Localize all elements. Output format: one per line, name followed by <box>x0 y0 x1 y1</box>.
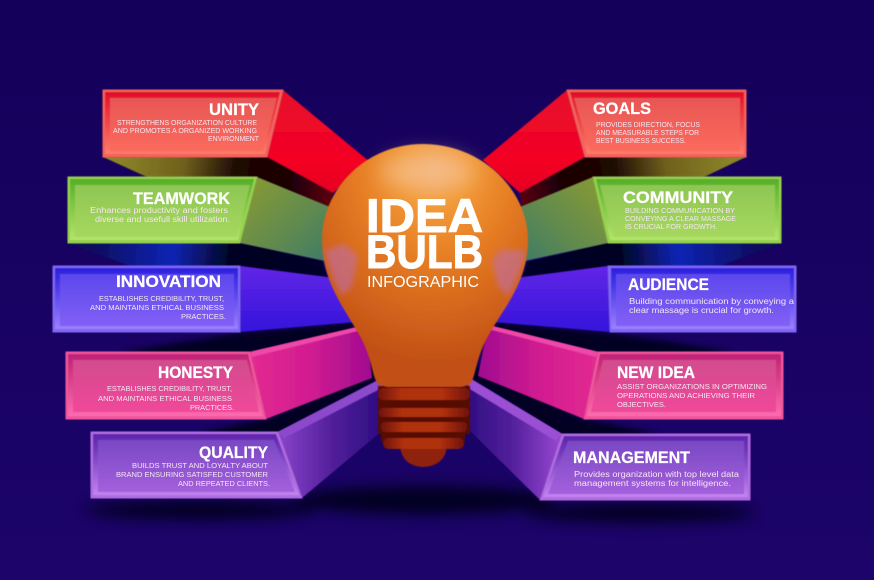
panel: quality <box>91 378 382 498</box>
honesty description: AND MAINTAINS ETHICAL BUSINESS <box>98 394 232 403</box>
unity description: STRENGTHENS ORGANIZATION CULTURE <box>117 118 257 127</box>
bulb title: INFOGRAPHIC <box>367 274 479 291</box>
new idea description: ASSIST ORGANIZATIONS IN OPTIMIZING <box>617 382 767 391</box>
quality side face <box>278 378 382 498</box>
community description: IS CRUCIAL FOR GROWTH. <box>625 222 717 231</box>
new idea side highlight <box>488 325 598 357</box>
unity front face <box>103 90 283 157</box>
teamwork description: diverse and usefull skill utilization. <box>95 215 230 224</box>
honesty description: ESTABLISHES CREDIBILITY, TRUST, <box>107 384 232 393</box>
community description: BUILDING COMMUNICATION BY <box>625 206 735 215</box>
panel: audience <box>494 266 796 332</box>
unity description: AND PROMOTES A ORGANIZED WORKING <box>113 126 257 135</box>
new idea side face <box>478 325 598 419</box>
new idea description: OPERATIONS AND ACHIEVING THEIR <box>617 391 755 400</box>
audience title: AUDIENCE <box>628 275 709 294</box>
quality description: BUILDS TRUST AND LOYALTY ABOUT <box>132 461 268 470</box>
management side highlight <box>468 377 562 441</box>
goals underside <box>520 157 746 210</box>
innovation description: AND MAINTAINS ETHICAL BUSINESS <box>90 303 224 312</box>
audience front face <box>608 266 796 332</box>
unity side face <box>267 90 370 193</box>
innovation description: PRACTICES. <box>181 312 226 321</box>
goals description: BEST BUSINESS SUCCESS. <box>596 136 686 145</box>
icon: light bulb <box>322 144 528 467</box>
management description <box>574 470 740 488</box>
management title: MANAGEMENT <box>573 448 691 467</box>
teamwork side face <box>240 177 330 262</box>
goals description: PROVIDES DIRECTION, FOCUS <box>596 120 700 129</box>
audience description <box>629 297 795 315</box>
community title: COMMUNITY <box>623 188 734 207</box>
unity underside <box>103 157 333 210</box>
teamwork title: TEAMWORK <box>133 189 231 208</box>
bulb title: IDEA <box>366 189 483 242</box>
management front face <box>540 434 750 500</box>
panel: new idea <box>478 325 783 419</box>
innovation description: ESTABLISHES CREDIBILITY, TRUST, <box>99 294 224 303</box>
panel: teamwork <box>68 177 330 278</box>
honesty description: PRACTICES. <box>190 403 234 412</box>
unity title: UNITY <box>209 100 260 119</box>
teamwork front face <box>68 177 257 243</box>
teamwork description <box>90 206 230 224</box>
bulb right reflection <box>492 250 525 296</box>
new idea description <box>617 382 767 409</box>
bulb title: BULB <box>366 225 483 278</box>
management description: management systems for intelligence. <box>574 479 731 488</box>
teamwork underside <box>68 243 328 278</box>
bulb left reflection <box>325 244 358 296</box>
honesty side face <box>250 325 372 419</box>
teamwork description: Enhances productivity and fosters <box>90 206 228 215</box>
quality title: QUALITY <box>199 443 269 462</box>
community description: CONVEYING A CLEAR MASSAGE <box>625 214 736 223</box>
community underside <box>522 243 781 278</box>
panel: unity <box>103 90 370 210</box>
community front face <box>593 177 781 243</box>
bulb screw base <box>378 386 470 467</box>
quality side highlight <box>278 378 382 438</box>
audience description: clear massage is crucial for growth. <box>629 306 774 315</box>
quality description: BRAND ENSURING SATISFED CUSTOMER <box>116 470 268 479</box>
panel: community <box>520 177 781 278</box>
management side face <box>464 377 562 500</box>
goals side face <box>483 90 585 193</box>
quality description <box>116 461 270 488</box>
goals front face <box>567 90 746 157</box>
quality front face <box>91 432 302 498</box>
unity description <box>113 118 259 143</box>
panel: honesty <box>66 325 372 419</box>
bulb highlight <box>380 154 476 190</box>
panel: management <box>464 377 750 500</box>
innovation description <box>90 294 226 321</box>
honesty front face <box>66 352 266 419</box>
new idea description: OBJECTIVES. <box>617 400 666 409</box>
honesty description <box>98 384 234 412</box>
unity description: ENVIRONMENT <box>208 134 259 143</box>
honesty title: HONESTY <box>158 363 234 382</box>
honesty side highlight <box>250 325 366 357</box>
bulb title <box>366 189 483 291</box>
bulb glass <box>322 144 528 387</box>
audience side face <box>494 266 610 332</box>
goals description: AND MEASURABLE STEPS FOR <box>596 128 699 137</box>
quality description: AND REPEATED CLIENTS. <box>178 479 270 488</box>
management description: Provides organization with top level data <box>574 470 740 479</box>
panel: goals <box>483 90 746 210</box>
innovation front face <box>53 266 240 332</box>
innovation title: INNOVATION <box>116 272 221 291</box>
goals title: GOALS <box>593 99 651 118</box>
new idea front face <box>584 352 783 419</box>
goals description <box>596 120 700 145</box>
panel: innovation <box>53 266 356 332</box>
innovation side face <box>240 266 356 332</box>
community side face <box>520 177 608 262</box>
community description <box>625 206 736 231</box>
audience description: Building communication by conveying a <box>629 297 795 306</box>
new idea title: NEW IDEA <box>617 363 695 382</box>
